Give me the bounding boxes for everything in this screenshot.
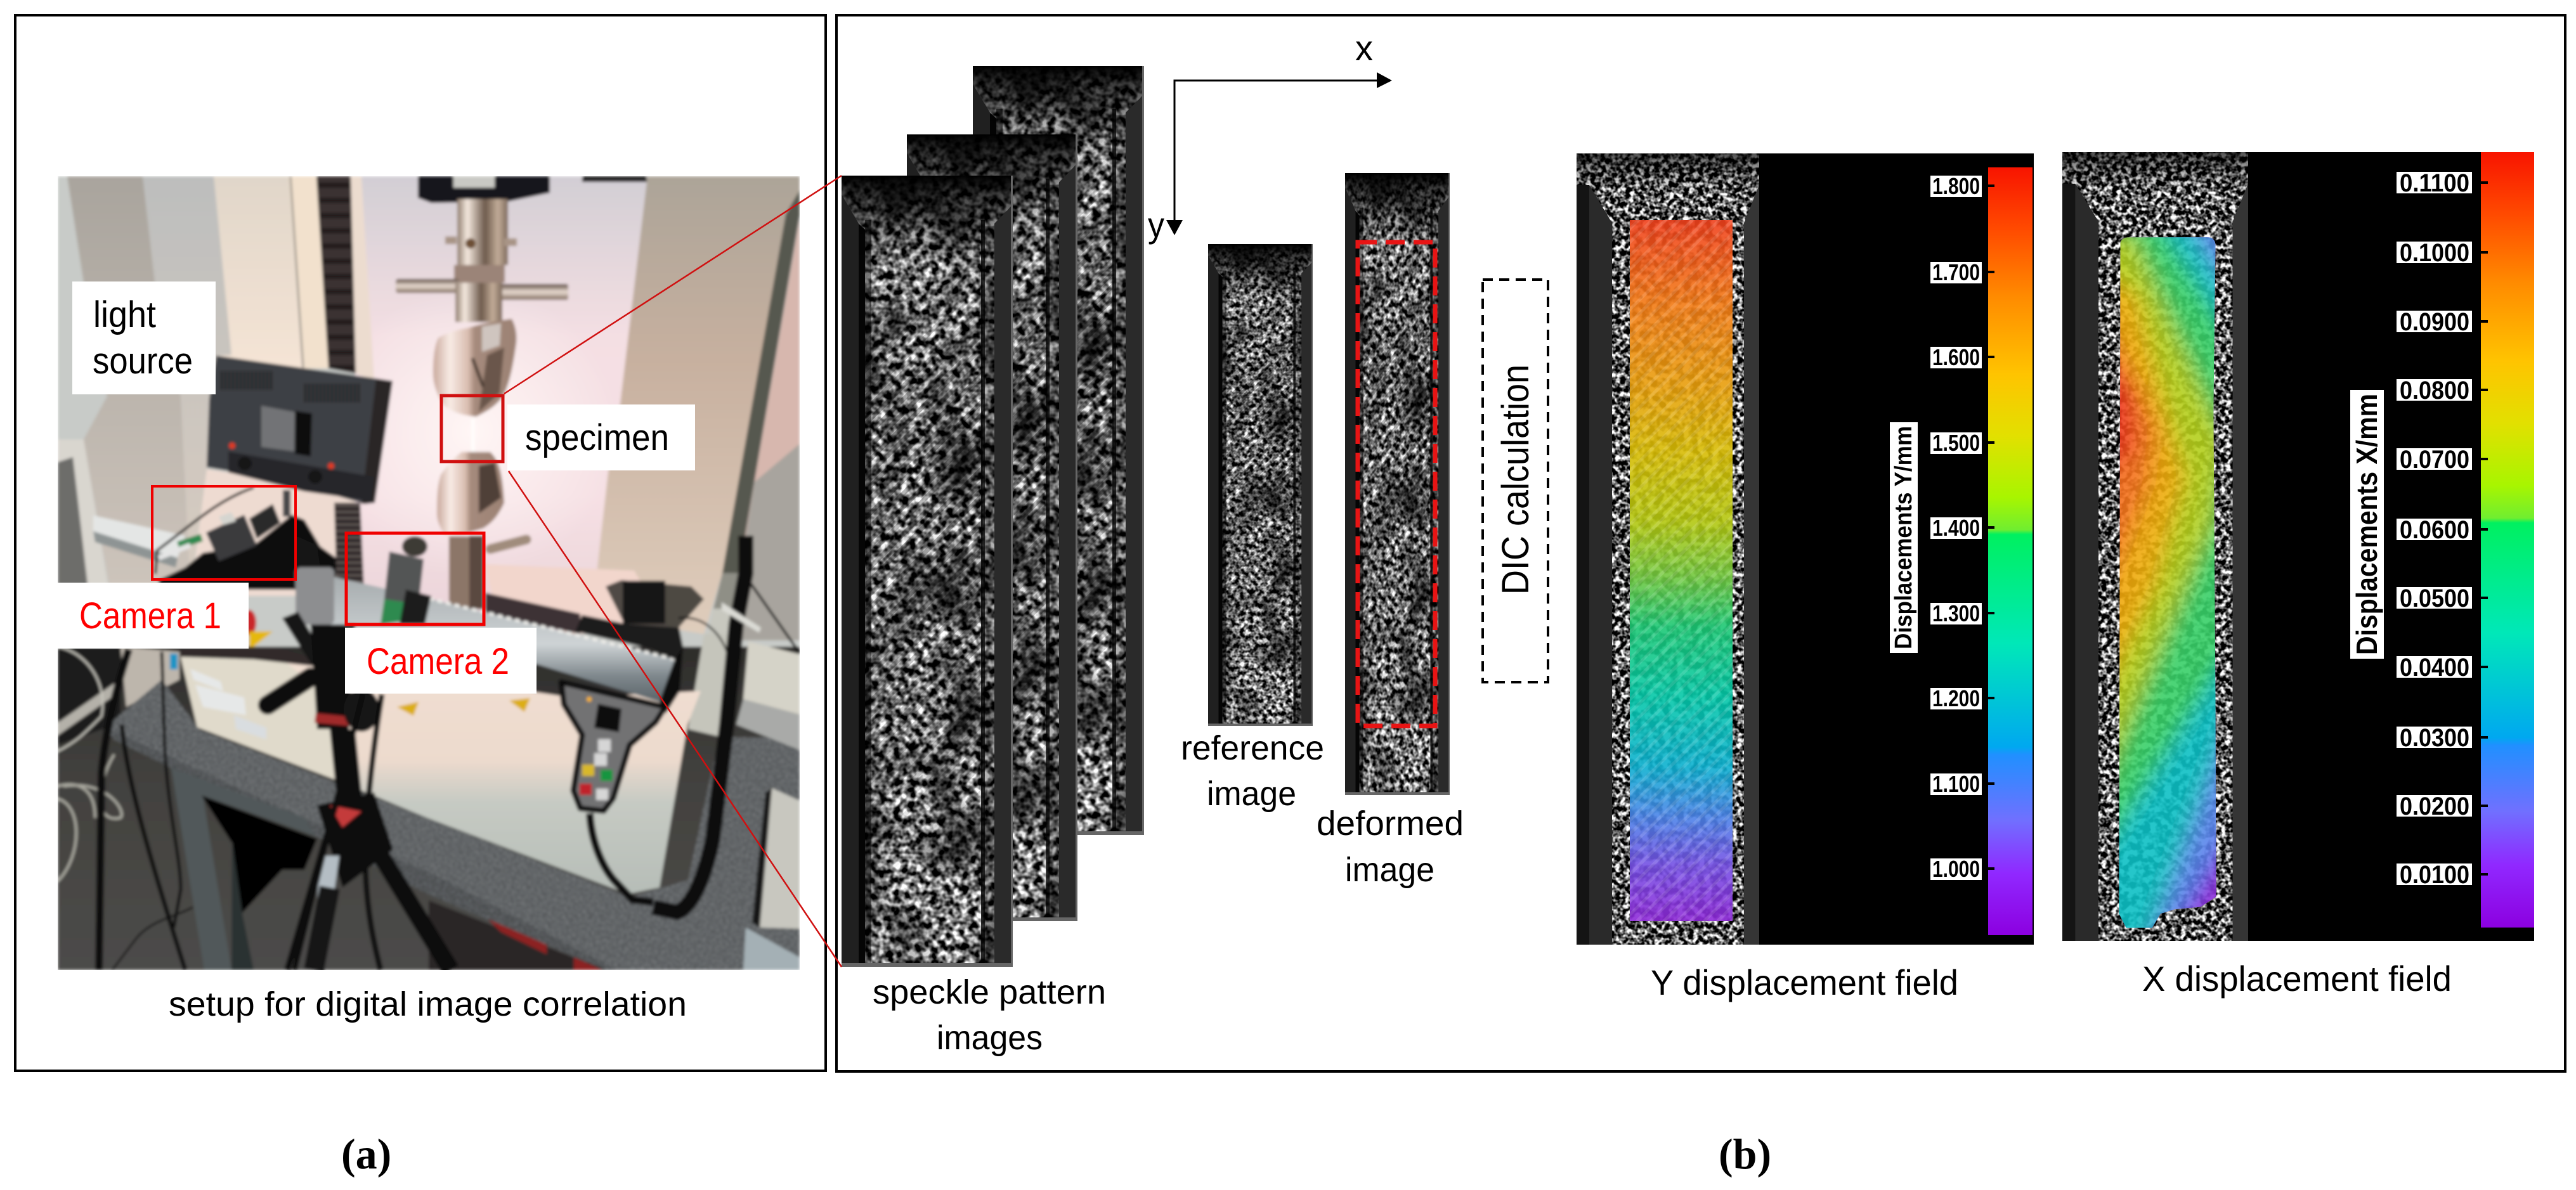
tick labels: X displacement: 0.0500 <box>2400 585 2469 612</box>
specimen image with speckle <box>2062 152 2248 941</box>
axes: x and y arrows: y <box>1148 205 1164 245</box>
label: specimen: specimen <box>525 417 669 458</box>
label: Camera 1 <box>58 583 249 649</box>
caption: reference image <box>1181 729 1324 813</box>
pads, block, controller <box>606 580 704 628</box>
tripod <box>296 567 334 624</box>
red dashed region of interest <box>1358 242 1435 726</box>
label: light source: light <box>93 294 156 335</box>
tick labels: X displacement: 0.0600 <box>2400 516 2469 544</box>
tick labels: Y displacement: 1.200 <box>1932 685 1980 711</box>
axis title: Displacements Y/mm: Displacements Y/mm <box>1890 426 1917 649</box>
panel: DIC results frame (b) <box>836 15 2565 1071</box>
tick labels: Y displacement: 1.400 <box>1932 515 1980 541</box>
label: specimen <box>507 404 695 470</box>
tick labels: X displacement: 0.1100 <box>2400 169 2469 197</box>
tick labels: X displacement: 0.0300 <box>2400 724 2469 752</box>
tick labels: Y displacement: 1.000 <box>1932 856 1980 882</box>
axes: x and y arrows <box>1148 28 1392 245</box>
tick labels: X displacement <box>2397 169 2472 889</box>
specimen image with speckle <box>1577 153 1759 945</box>
camera 2 <box>384 552 424 605</box>
label: light source <box>72 281 216 394</box>
caption: deformed image: deformed <box>1317 805 1464 843</box>
callout box: specimen <box>441 396 503 462</box>
axes: x and y arrows: x <box>1355 28 1373 68</box>
tick labels: Y displacement: 1.800 <box>1932 173 1980 199</box>
caption: setup for digital image correlation: setup for digital image correlation <box>169 985 687 1023</box>
speckle image: middle of stack <box>907 134 1077 921</box>
deformed image <box>1345 173 1450 795</box>
caption: reference image: image <box>1207 775 1296 813</box>
label: light source: source <box>93 340 193 382</box>
tick labels: Y displacement: 1.100 <box>1932 771 1980 797</box>
reference image <box>1208 244 1313 726</box>
tick labels: Y displacement: 1.500 <box>1932 430 1980 456</box>
speckle image: back of stack <box>973 66 1144 835</box>
camera 1 <box>159 515 336 590</box>
caption: Y displacement field: Y displacement field <box>1651 962 1958 1002</box>
left shelf and rail <box>58 439 108 583</box>
tick labels: X displacement: 0.0200 <box>2400 792 2469 820</box>
upper machine <box>418 176 550 203</box>
label: Camera 2 <box>345 628 537 694</box>
callout box: camera 1 <box>152 486 296 579</box>
axis title: Displacements X/mm: Displacements X/mm <box>2350 394 2383 655</box>
speckle image: front of stack <box>842 176 1013 967</box>
photo: tensile test machine with two cameras <box>58 176 800 970</box>
tick labels: X displacement: 0.0100 <box>2400 861 2469 889</box>
table <box>105 680 800 970</box>
tick labels: Y displacement: 1.600 <box>1932 344 1980 370</box>
dashed box: DIC calculation: DIC calculation <box>1494 365 1537 595</box>
lower floor <box>58 647 800 970</box>
panel label: (b): (b) <box>1719 1130 1771 1178</box>
panel: X displacement field <box>2062 152 2534 954</box>
machine base <box>286 661 701 896</box>
callout box: camera 2 <box>346 533 484 624</box>
panel: Y displacement field <box>1577 153 2034 945</box>
dashed box: DIC calculation <box>1483 280 1548 682</box>
rail <box>320 574 675 702</box>
tick labels: X displacement: 0.1000 <box>2400 239 2469 267</box>
panel: setup frame (a) <box>15 15 826 1071</box>
caption: speckle pattern images: images <box>937 1019 1043 1057</box>
caption: X displacement field: X displacement field <box>2142 959 2452 999</box>
caption: deformed image <box>1317 805 1464 889</box>
tick labels: X displacement: 0.0400 <box>2400 654 2469 682</box>
caption: deformed image: image <box>1345 851 1434 889</box>
colour bar: X displacement <box>2472 152 2534 928</box>
tick labels: X displacement: 0.0800 <box>2400 377 2469 404</box>
caption: reference image: reference <box>1181 729 1324 767</box>
tick labels: Y displacement: 1.700 <box>1932 259 1980 285</box>
tick labels: Y displacement: 1.300 <box>1932 600 1980 626</box>
left cables <box>99 649 129 970</box>
tick labels: X displacement: 0.0900 <box>2400 308 2469 336</box>
tick labels: X displacement: 0.0700 <box>2400 446 2469 474</box>
caption: speckle pattern images: speckle pattern <box>873 973 1106 1011</box>
zoom connector lines from specimen to speckle images <box>504 176 842 967</box>
label: Camera 2: Camera 2 <box>367 641 509 682</box>
tick labels: Y displacement <box>1930 173 1982 882</box>
caption: speckle pattern images <box>873 973 1106 1057</box>
colour overlay: Y displacement <box>1630 220 1733 921</box>
label: Camera 1: Camera 1 <box>79 595 221 637</box>
colour bar: Y displacement <box>1982 167 2033 935</box>
light panel <box>207 356 393 504</box>
panel label: (a): (a) <box>341 1130 391 1178</box>
colour overlay: X displacement <box>2097 212 2239 954</box>
